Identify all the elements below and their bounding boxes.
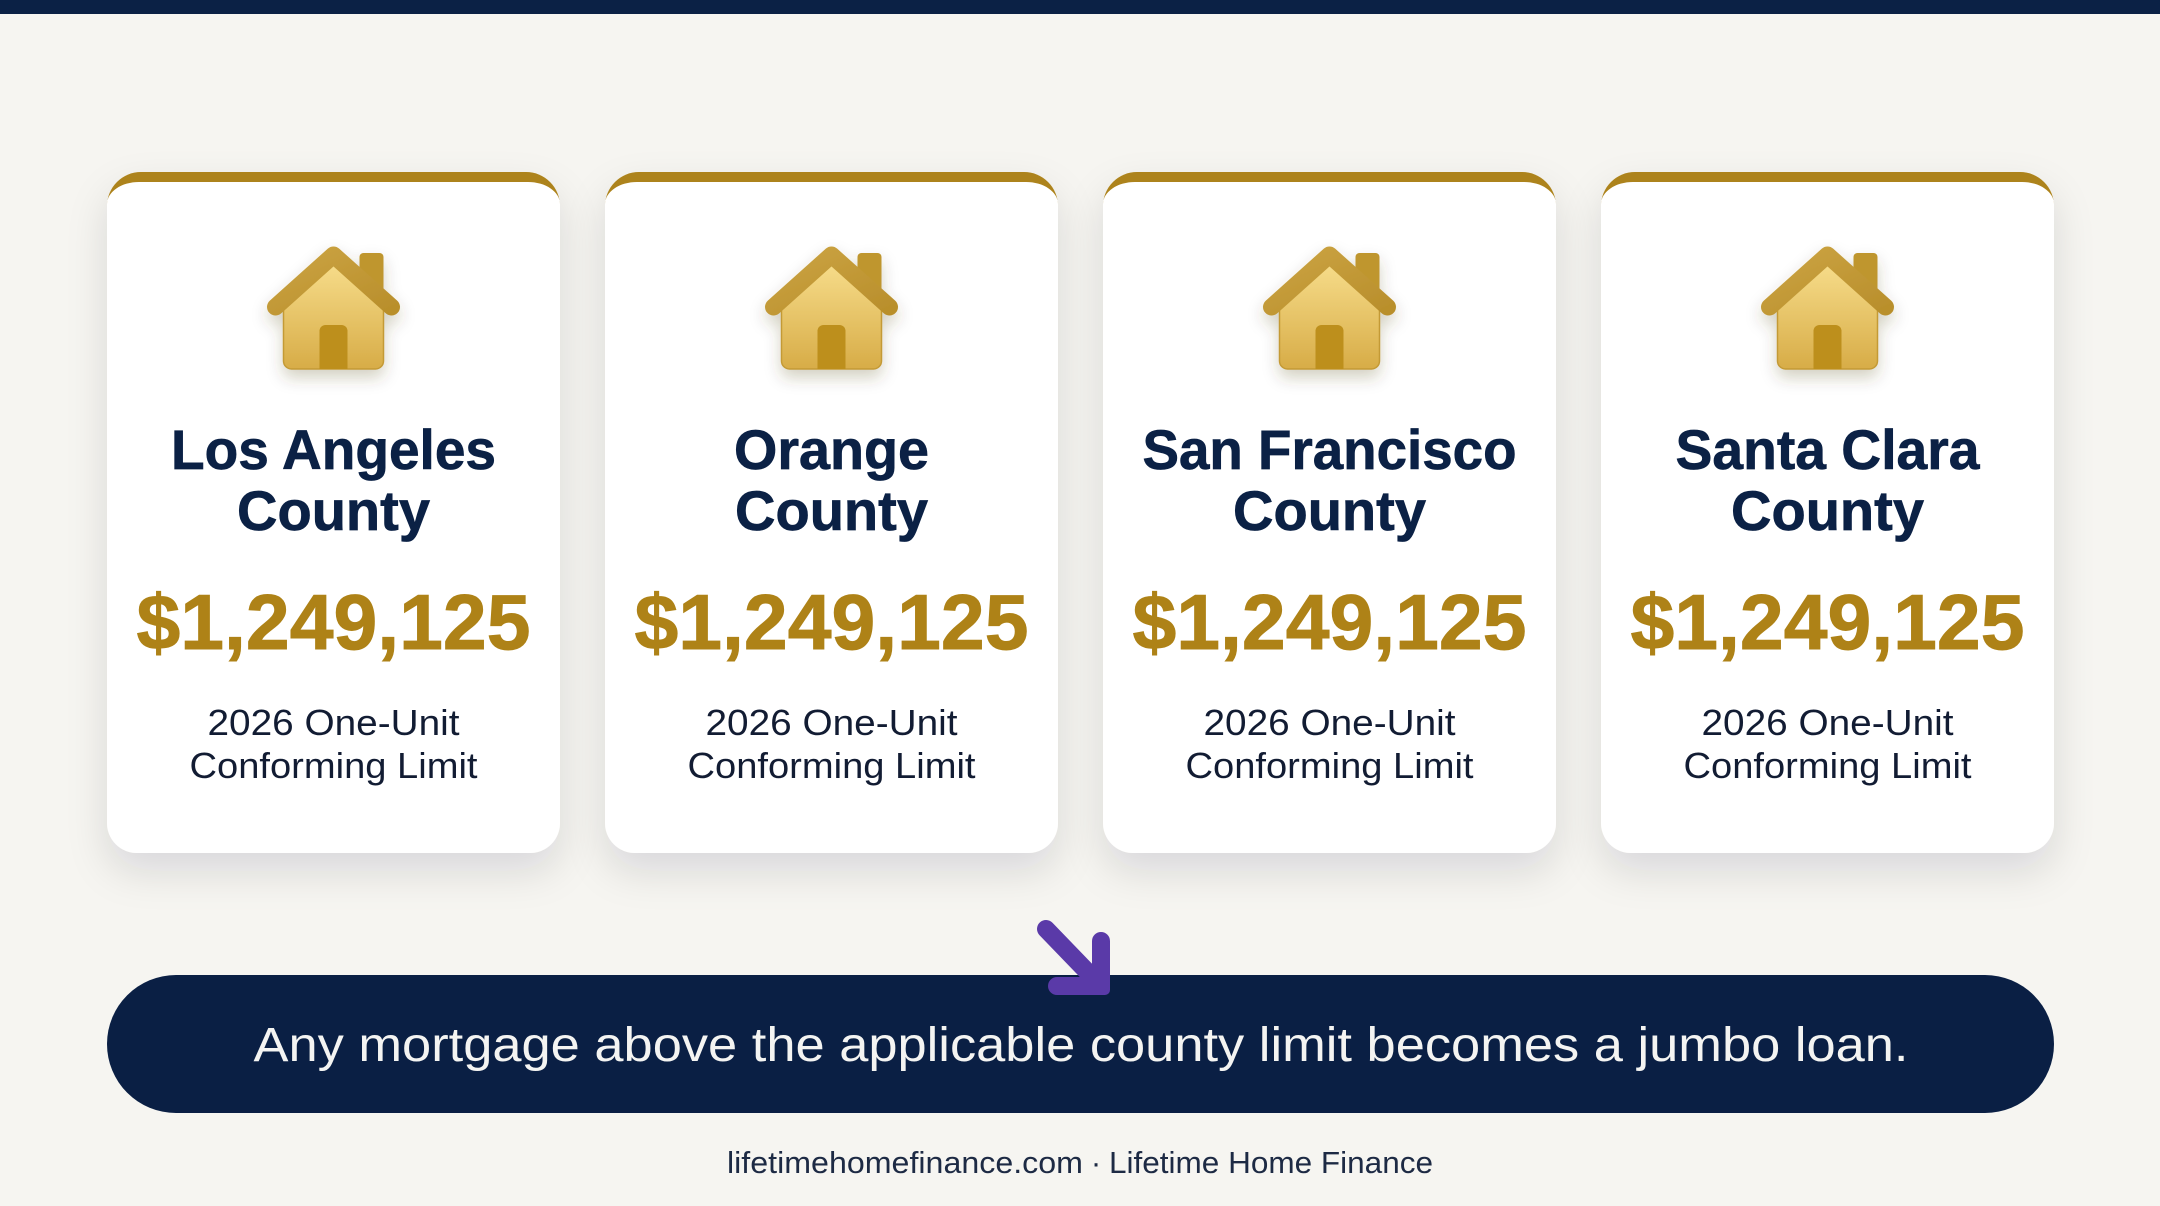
limit description: 2026 One-Unit [706, 702, 958, 743]
county name: San Francisco [1142, 418, 1516, 481]
county name [1676, 418, 1980, 542]
arrow [1046, 929, 1110, 995]
limit amount: $1,249,125 [1630, 578, 2024, 666]
county name: Los Angeles [171, 418, 496, 481]
limit description [190, 702, 478, 786]
limit description: Conforming Limit [190, 745, 478, 786]
limit description: 2026 One-Unit [1204, 702, 1456, 743]
panel: Los Angeles County [107, 172, 560, 853]
county name: County [237, 479, 430, 542]
county name [171, 418, 496, 542]
card background [1601, 172, 2054, 853]
county name: Santa Clara [1676, 418, 1980, 481]
card background [605, 172, 1058, 853]
footer: · [1091, 1145, 1101, 1180]
icon: house [276, 253, 392, 369]
county name: County [1731, 479, 1924, 542]
limit description: Conforming Limit [1186, 745, 1474, 786]
card background [1103, 172, 1556, 853]
panel: Santa Clara County [1601, 172, 2054, 853]
footer: Lifetime Home Finance [1109, 1145, 1433, 1180]
county name [1142, 418, 1516, 542]
limit description: 2026 One-Unit [208, 702, 460, 743]
county name: County [735, 479, 928, 542]
panel: Orange County [605, 172, 1058, 853]
card background [107, 172, 560, 853]
limit description: Conforming Limit [1684, 745, 1972, 786]
limit description [1186, 702, 1474, 786]
callout banner [107, 975, 2054, 1113]
county name: Orange [734, 418, 929, 481]
limit description [1684, 702, 1972, 786]
limit description: 2026 One-Unit [1702, 702, 1954, 743]
callout banner: Any mortgage above the applicable county limit becomes a jumbo loan. [254, 1019, 1908, 1072]
footer [727, 1145, 1433, 1180]
icon: house [1272, 253, 1388, 369]
county name: County [1233, 479, 1426, 542]
footer: lifetimehomefinance.com [727, 1145, 1083, 1180]
icon: house [1770, 253, 1886, 369]
limit amount: $1,249,125 [634, 578, 1028, 666]
limit amount: $1,249,125 [1132, 578, 1526, 666]
panel: San Francisco County [1103, 172, 1556, 853]
limit amount: $1,249,125 [136, 578, 530, 666]
county name [734, 418, 929, 542]
limit description [688, 702, 976, 786]
icon: house [774, 253, 890, 369]
top bar [0, 0, 2160, 14]
limit description: Conforming Limit [688, 745, 976, 786]
